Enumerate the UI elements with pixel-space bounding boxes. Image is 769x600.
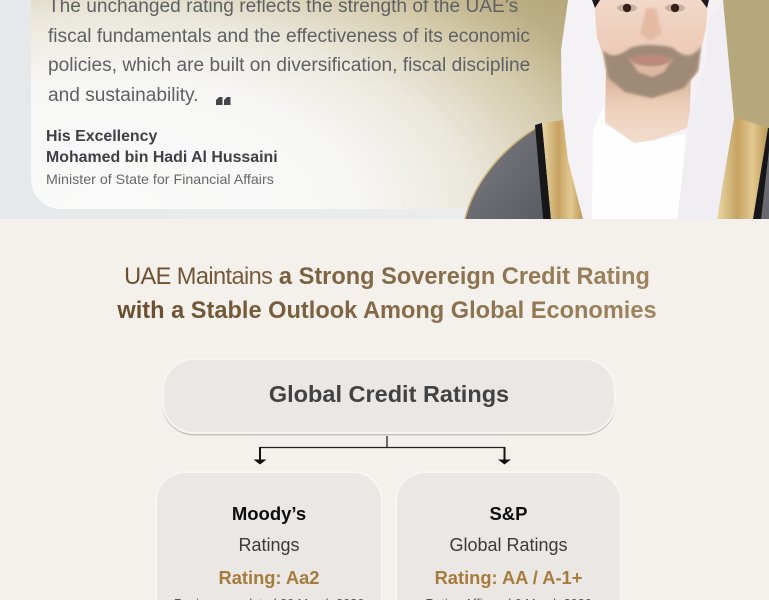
ghutra front fold	[677, 0, 734, 219]
speaker role: Minister of State for Financial Affairs	[46, 172, 274, 188]
neck	[605, 70, 691, 143]
panel: Moody's rating card	[155, 471, 383, 600]
quote text	[48, 0, 530, 106]
arrows: connector to rating cards	[254, 436, 511, 464]
quote text: and sustainability.	[48, 85, 198, 106]
title	[0, 260, 769, 328]
face	[594, 0, 708, 98]
rating value: Rating: AA / A-1+	[435, 567, 582, 588]
cheek and chin skin inside beard	[628, 57, 674, 77]
agency name: Moody’s	[232, 503, 306, 524]
eyes	[617, 4, 685, 12]
panel: hero quote banner	[0, 0, 769, 219]
bisht robe left	[465, 120, 583, 219]
agency subtitle: Global Ratings	[449, 535, 568, 555]
panel: S&P rating card	[395, 471, 622, 600]
quote card background	[31, 0, 769, 209]
speaker name: Mohamed bin Hadi Al Hussaini	[46, 149, 278, 166]
panel: global credit ratings heading	[162, 358, 616, 434]
quote text: fiscal fundamentals and the effectiveness of its economic	[48, 26, 530, 47]
icon: closing quotation mark	[216, 97, 230, 105]
agency name: S&P	[489, 503, 528, 524]
portrait of the minister	[464, 0, 769, 219]
quote text: policies, which are built on diversification, fiscal discipline	[48, 55, 530, 76]
panel: global credit ratings heading: Global Credit Ratings	[269, 381, 509, 407]
agency subtitle: Ratings	[238, 535, 300, 555]
thobe	[592, 105, 686, 219]
nose shadow	[640, 8, 662, 41]
bisht robe right	[717, 117, 769, 219]
rating value: Rating: Aa2	[219, 567, 319, 588]
speaker attribution	[46, 128, 278, 188]
ghutra headscarf	[561, 0, 734, 219]
mouth	[631, 54, 671, 66]
speaker title: His Excellency	[46, 128, 157, 145]
hair	[592, 0, 709, 8]
beard	[603, 45, 701, 98]
